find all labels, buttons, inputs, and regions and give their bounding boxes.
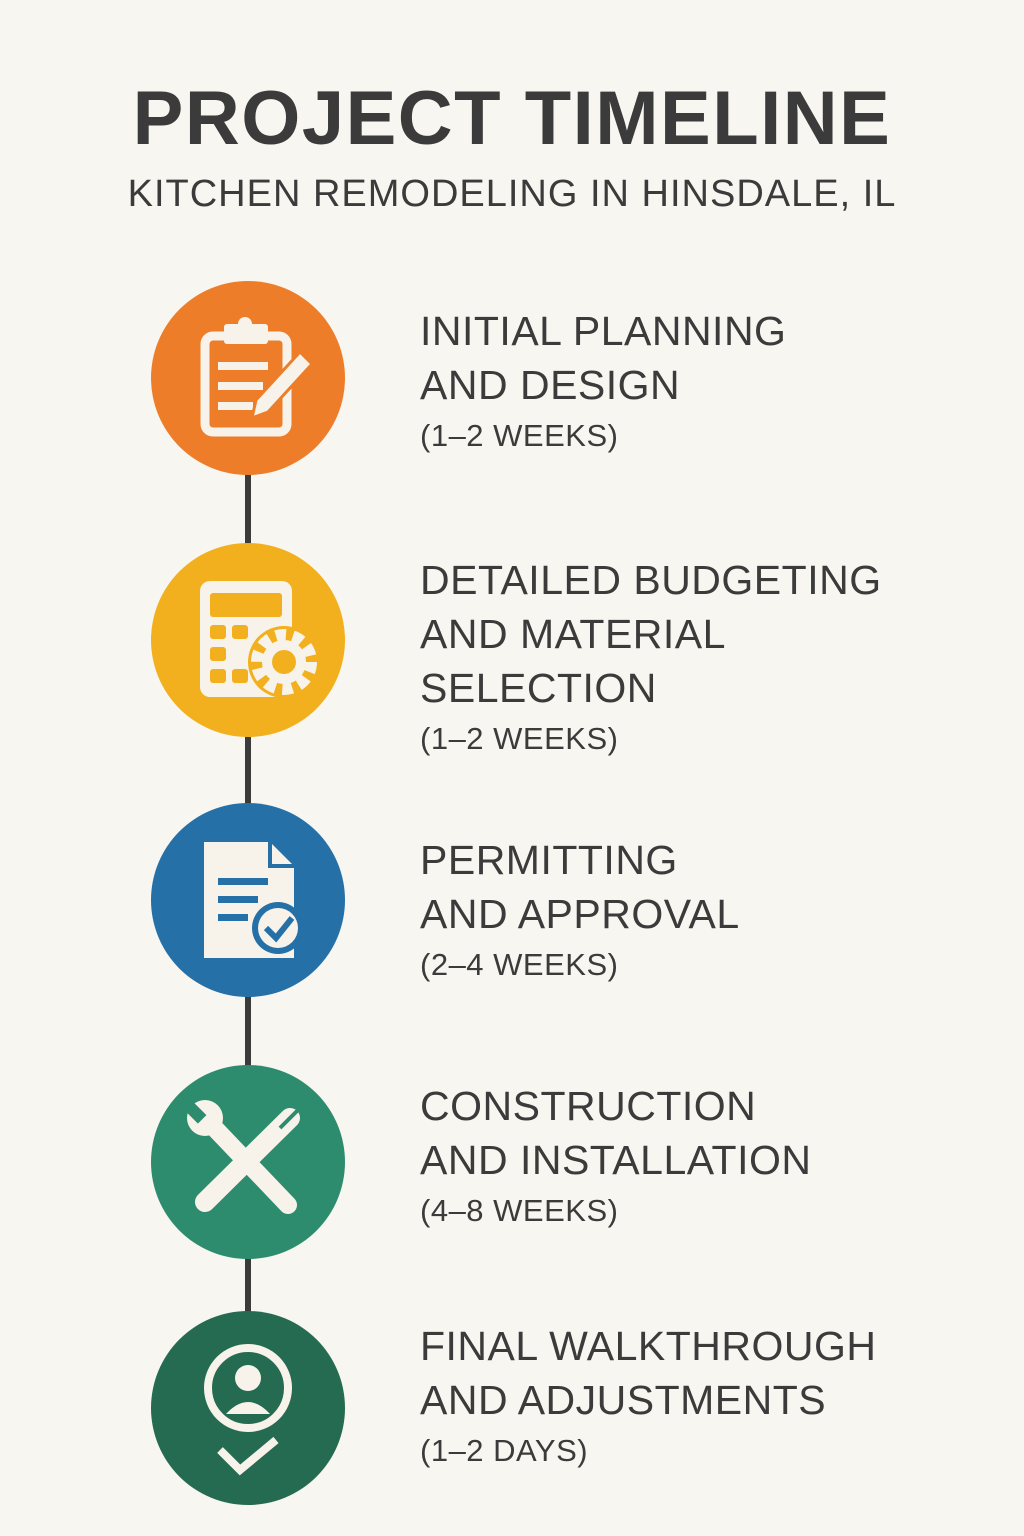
- step 2 icon: calculator with gear: [151, 543, 345, 737]
- step 4 icon: tools: [151, 1065, 345, 1259]
- connector line: [245, 470, 251, 1330]
- step 3 text: AND APPROVAL: [420, 891, 740, 937]
- step 1 text: (1–2 WEEKS): [420, 418, 618, 453]
- title: PROJECT TIMELINE: [133, 76, 891, 161]
- step 5 text: (1–2 DAYS): [420, 1433, 588, 1468]
- step 1 text: [420, 308, 786, 453]
- step 4 text: (4–8 WEEKS): [420, 1193, 618, 1228]
- step 2 text: SELECTION: [420, 665, 657, 711]
- step 3 text: PERMITTING: [420, 837, 678, 883]
- step 1 text: INITIAL PLANNING: [420, 308, 786, 354]
- step 4 text: CONSTRUCTION: [420, 1083, 756, 1129]
- step 5 icon: person check: [151, 1311, 345, 1505]
- step 2 text: [420, 557, 882, 756]
- step 4 text: AND INSTALLATION: [420, 1137, 812, 1183]
- step 2 text: AND MATERIAL: [420, 611, 726, 657]
- step 1 icon: clipboard: [151, 281, 345, 475]
- step 3 icon: document check: [151, 803, 345, 997]
- step 5 text: AND ADJUSTMENTS: [420, 1377, 826, 1423]
- step 1 text: AND DESIGN: [420, 362, 680, 408]
- step 3 text: (2–4 WEEKS): [420, 947, 618, 982]
- step 4 text: [420, 1083, 812, 1228]
- subtitle: KITCHEN REMODELING IN HINSDALE, IL: [128, 173, 896, 215]
- step 5 text: FINAL WALKTHROUGH: [420, 1323, 876, 1369]
- step 2 text: (1–2 WEEKS): [420, 721, 618, 756]
- step 5 text: [420, 1323, 876, 1468]
- step 3 text: [420, 837, 740, 982]
- step 2 text: DETAILED BUDGETING: [420, 557, 882, 603]
